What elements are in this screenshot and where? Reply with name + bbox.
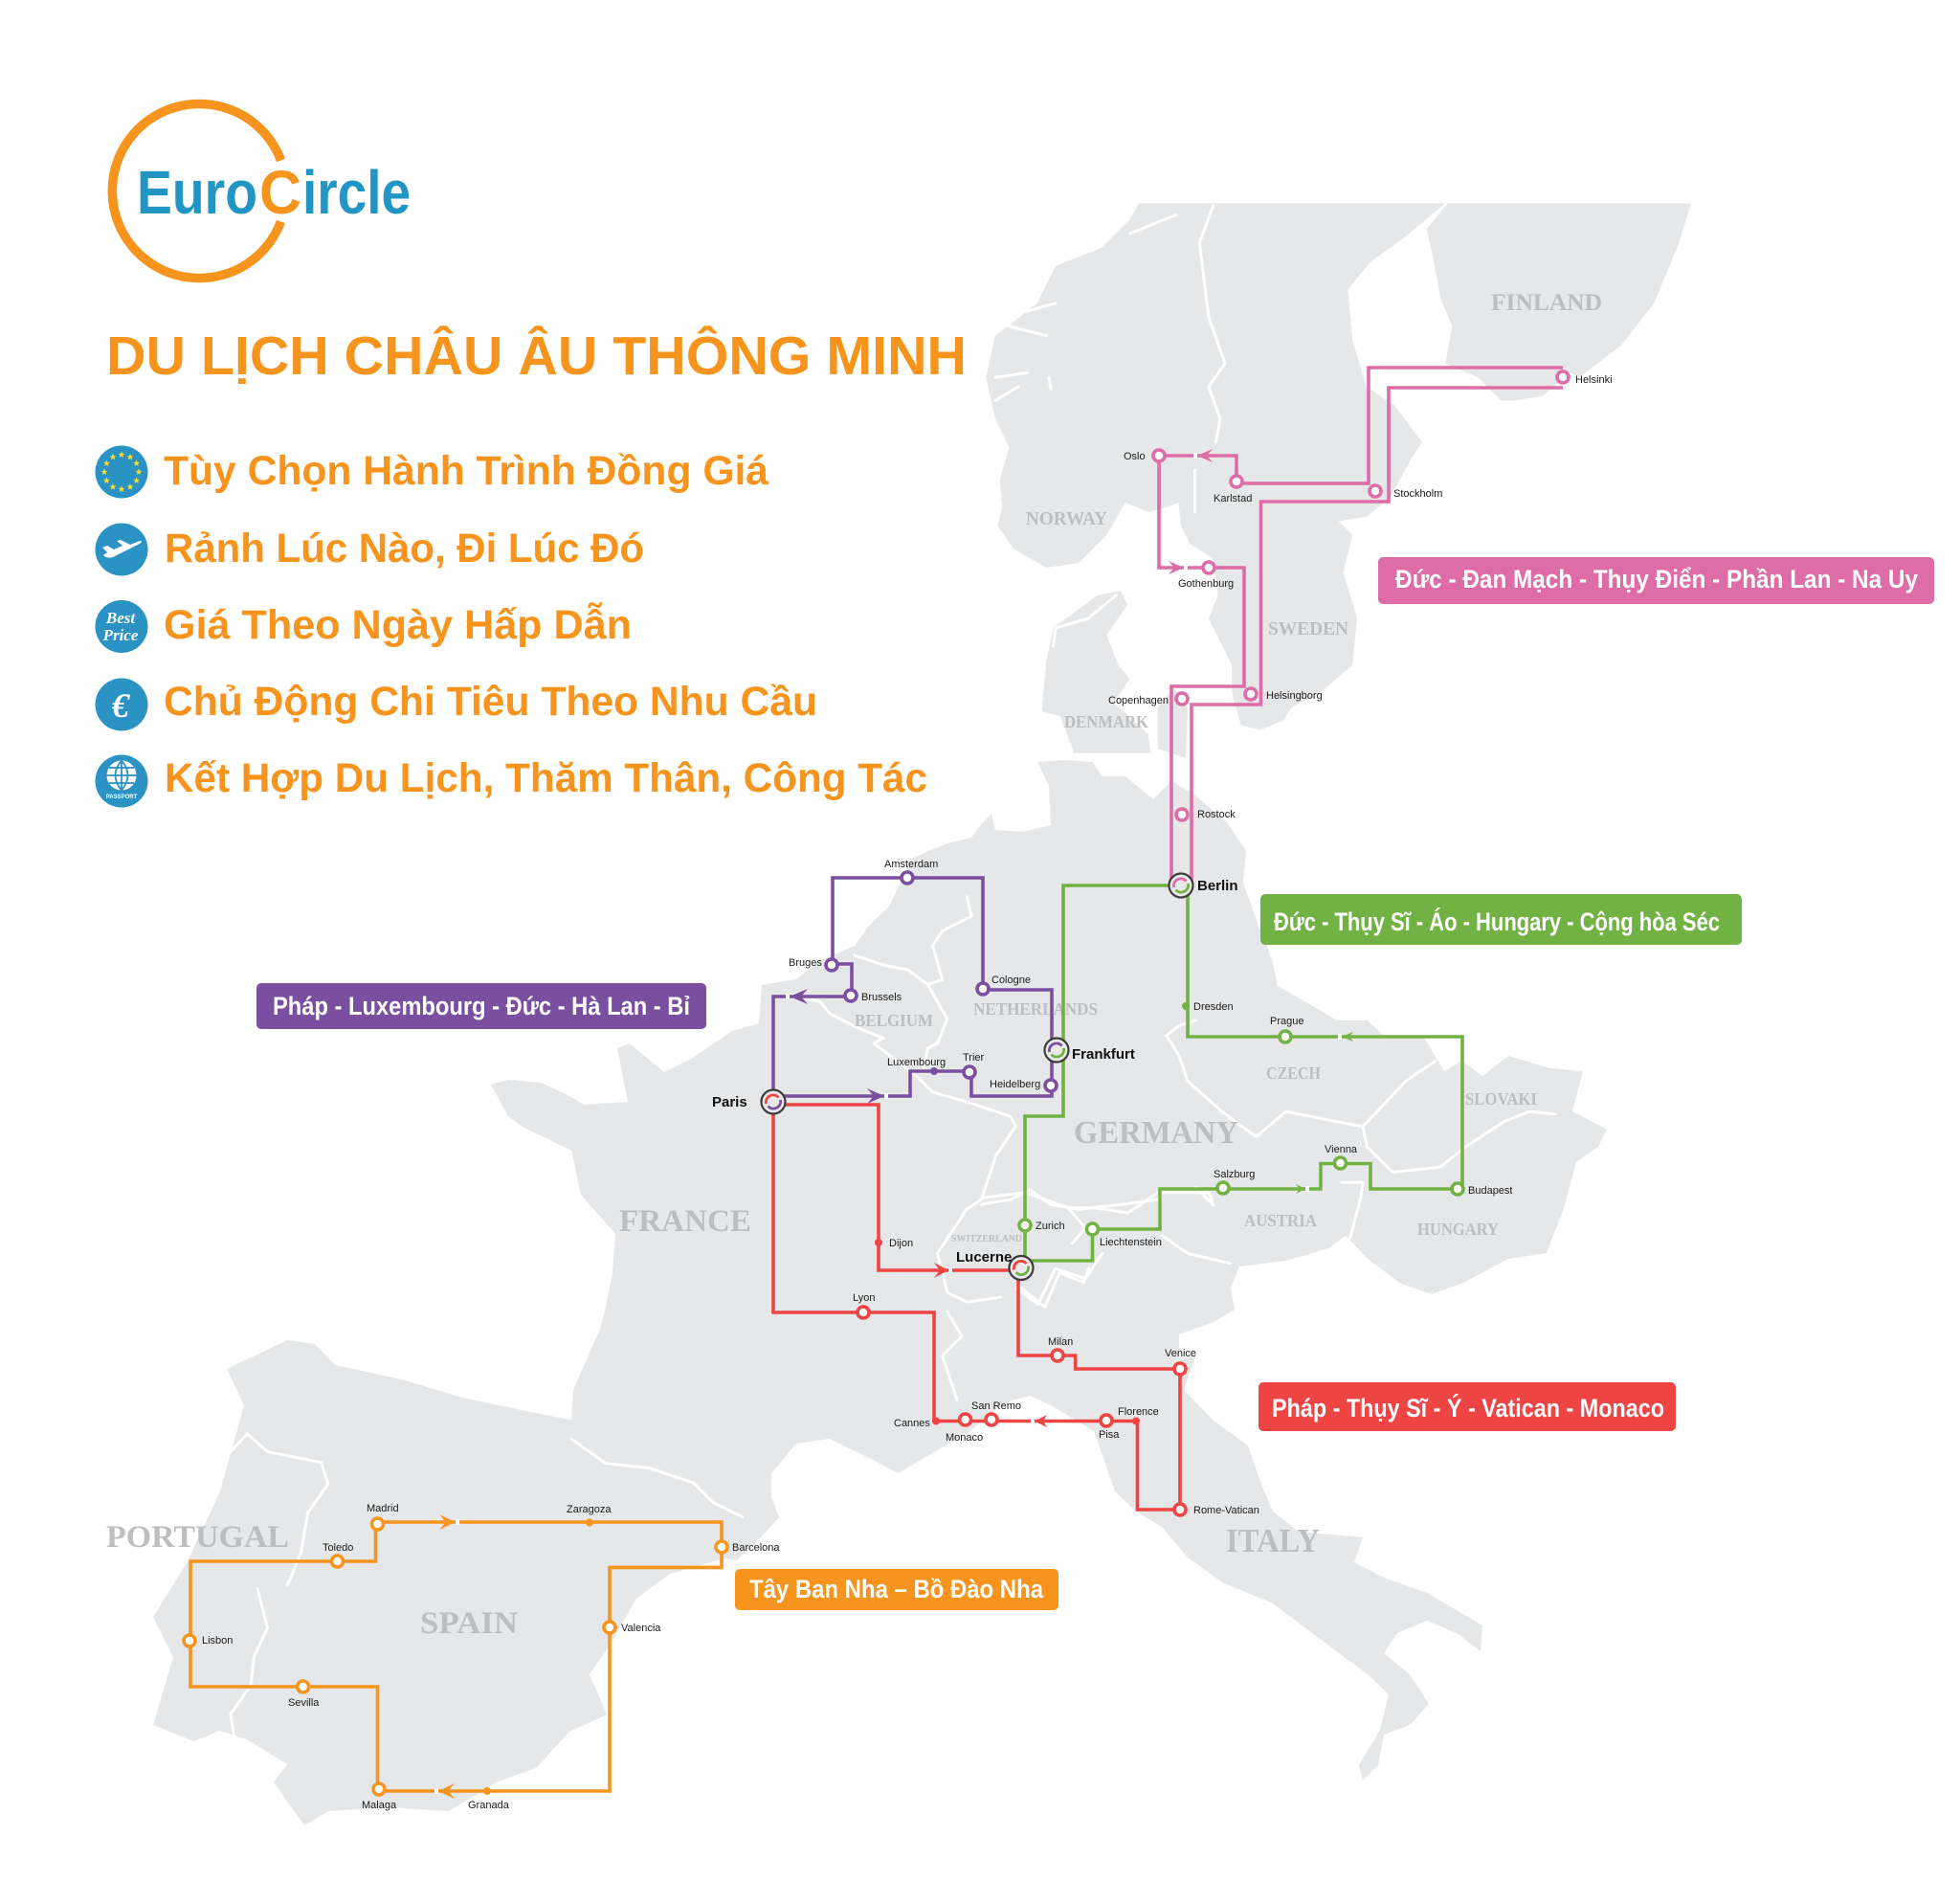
arrow <box>1296 1184 1309 1194</box>
stop: Sevilla: Sevilla <box>288 1697 320 1709</box>
country labels: SLOVAKI <box>1465 1089 1537 1109</box>
logo: EuroCircle: Euro <box>137 158 257 227</box>
stop: Monaco: Monaco <box>946 1432 983 1444</box>
stop: Dijon <box>875 1238 913 1249</box>
stop: Malaga <box>362 1783 397 1811</box>
stop: Helsinki <box>1557 371 1613 386</box>
stop: Budapest: Budapest <box>1468 1185 1512 1197</box>
stop: Rome-Vatican: Rome-Vatican <box>1193 1505 1259 1516</box>
feature: plane icon <box>96 523 147 576</box>
stop: Vienna: Vienna <box>1325 1144 1358 1155</box>
stop: Granada <box>468 1787 510 1811</box>
stop: Madrid <box>367 1503 399 1530</box>
stop: Pisa: Pisa <box>1099 1429 1120 1441</box>
stop: Lisbon <box>184 1635 233 1646</box>
stop: Venice: Venice <box>1165 1348 1196 1359</box>
stop: Prague: Prague <box>1270 1016 1303 1027</box>
stop: Malaga: Malaga <box>362 1800 397 1811</box>
stop: Copenhagen <box>1108 693 1188 706</box>
stop: Lyon <box>853 1292 875 1318</box>
map: continental Europe <box>153 760 1607 1826</box>
feature text: Chủ Động Chi Tiêu Theo Nhu Cầu <box>164 680 817 725</box>
feature: euro icon: € <box>111 686 130 725</box>
logo: EuroCircle: C <box>259 158 301 227</box>
stop: Brussels: Brussels <box>861 992 902 1003</box>
stop: Oslo <box>1124 450 1165 462</box>
feature: best price icon: Price <box>102 626 139 644</box>
country labels: FINLAND <box>1491 290 1602 316</box>
stop: Sevilla <box>288 1681 320 1709</box>
stop: Karlstad <box>1214 476 1252 504</box>
stop: Amsterdam <box>884 859 938 884</box>
stop: Liechtenstein: Liechtenstein <box>1100 1237 1162 1248</box>
label: pink route <box>1378 557 1934 604</box>
stop: Karlstad: Karlstad <box>1214 493 1252 504</box>
stop: Zaragoza: Zaragoza <box>567 1504 612 1515</box>
hub: Paris: Paris <box>712 1094 747 1110</box>
label: green route: Đức - Thụy Sĩ - Áo - Hungary - Cộng hòa Séc <box>1274 907 1720 936</box>
arrow <box>1169 561 1188 574</box>
feature text: Rảnh Lúc Nào, Đi Lúc Đó <box>165 526 644 571</box>
stop: Helsingborg: Helsingborg <box>1266 690 1323 702</box>
country labels: BELGIUM <box>855 1011 933 1030</box>
stop: Prague <box>1270 1016 1303 1042</box>
stop: Stockholm <box>1370 485 1442 500</box>
country labels <box>106 290 1602 1641</box>
stop: Milan <box>1048 1336 1073 1361</box>
stop: Zurich <box>1019 1220 1065 1232</box>
arrow <box>1031 1415 1047 1427</box>
stop: Dijon: Dijon <box>889 1238 913 1249</box>
stop: Luxembourg: Luxembourg <box>887 1057 946 1068</box>
feature: best price icon: Best <box>105 609 136 627</box>
label: orange route <box>735 1569 1058 1610</box>
label: red route: Pháp - Thụy Sĩ - Ý - Vatican - Monaco <box>1272 1393 1664 1422</box>
stop: Rostock: Rostock <box>1197 809 1236 820</box>
stop: Monaco <box>946 1414 983 1444</box>
stop: Rostock <box>1176 809 1236 820</box>
stop: Florence: Florence <box>1118 1406 1159 1418</box>
feature text: Giá Theo Ngày Hấp Dẫn <box>164 601 632 648</box>
feature: passport globe icon: PASSPORT <box>106 795 138 800</box>
stop: Cannes: Cannes <box>894 1418 930 1429</box>
stop: Bruges: Bruges <box>789 957 822 969</box>
feature: best price icon <box>96 600 147 653</box>
stop: Florence <box>1118 1406 1159 1424</box>
stop: Venice <box>1165 1348 1196 1375</box>
map: Scandinavia and Denmark <box>986 203 1691 758</box>
stop: Budapest <box>1452 1183 1512 1197</box>
country labels: SWITZERLAND <box>951 1234 1022 1244</box>
stop: Barcelona: Barcelona <box>732 1542 780 1554</box>
stop: Madrid: Madrid <box>367 1503 399 1514</box>
map: borders east <box>983 1020 1555 1304</box>
stop: Stockholm: Stockholm <box>1393 488 1442 500</box>
stop: Trier: Trier <box>963 1052 985 1064</box>
country labels: PORTUGAL <box>106 1520 289 1555</box>
title: DU LỊCH CHÂU ÂU THÔNG MINH <box>106 325 967 387</box>
country labels: DENMARK <box>1064 712 1148 731</box>
feature text: Tùy Chọn Hành Trình Đồng Giá <box>164 449 768 494</box>
country labels: ITALY <box>1226 1522 1320 1559</box>
stop: Toledo: Toledo <box>323 1542 353 1554</box>
label: purple route <box>256 983 706 1029</box>
label: orange route: Tây Ban Nha – Bồ Đào Nha <box>749 1575 1044 1603</box>
hub: Berlin: Berlin <box>1197 878 1238 894</box>
stop: Trier <box>963 1052 985 1078</box>
stop: San Remo <box>971 1400 1021 1425</box>
arrow <box>934 1263 952 1278</box>
arrow <box>439 1514 459 1530</box>
hub: Frankfurt <box>1045 1038 1135 1063</box>
arrow <box>1338 1032 1353 1042</box>
arrow <box>867 1088 888 1104</box>
hub: Frankfurt: Frankfurt <box>1072 1046 1135 1063</box>
stop: Barcelona <box>716 1541 780 1554</box>
stop: Amsterdam: Amsterdam <box>884 859 938 870</box>
feature: EU flag icon <box>96 446 147 498</box>
stop: Zurich: Zurich <box>1036 1221 1065 1232</box>
stop: Cologne: Cologne <box>991 974 1031 986</box>
arrow <box>786 989 808 1004</box>
stop: Valencia <box>604 1622 661 1634</box>
country labels: SPAIN <box>420 1606 518 1641</box>
map: borders Iberia <box>224 1434 328 1736</box>
stop: Oslo: Oslo <box>1124 451 1146 462</box>
stop: Cologne <box>977 974 1031 995</box>
hub: Lucerne: Lucerne <box>956 1249 1012 1266</box>
logo: EuroCircle <box>112 103 411 278</box>
stop: Pisa <box>1099 1415 1120 1441</box>
stop: Luxembourg <box>887 1057 946 1075</box>
country labels: NORWAY <box>1026 508 1108 529</box>
stop: Granada: Granada <box>468 1800 510 1811</box>
stop: Bruges <box>789 957 837 971</box>
stop: Toledo <box>323 1542 353 1567</box>
stop: Vienna <box>1325 1144 1358 1169</box>
stop: Salzburg <box>1214 1169 1255 1194</box>
stop: Lyon: Lyon <box>853 1292 875 1304</box>
map: borders central <box>571 897 1157 1517</box>
route: France Luxembourg Germany Netherlands Belgium (purple) <box>773 859 1057 1104</box>
stop: Dresden: Dresden <box>1193 1001 1234 1013</box>
stop: Liechtenstein <box>1087 1223 1162 1248</box>
label: purple route: Pháp - Luxembourg - Đức - Hà Lan - Bỉ <box>273 992 690 1020</box>
route: Germany Switzerland Austria Hungary Czech (green) <box>1019 885 1512 1261</box>
feature: euro icon <box>96 678 147 731</box>
stop: Gothenburg: Gothenburg <box>1178 578 1234 590</box>
feature: passport globe icon <box>96 754 147 808</box>
route: Spain Portugal (orange) <box>184 1503 780 1811</box>
route: France Switzerland Italy Vatican Monaco (red) <box>773 1105 1259 1516</box>
country labels: FRANCE <box>619 1204 751 1239</box>
label: green route <box>1260 894 1742 945</box>
country labels: NETHERLANDS <box>973 999 1098 1019</box>
arrow <box>434 1783 455 1799</box>
hub: Lucerne <box>956 1249 1034 1280</box>
arrow <box>1193 449 1213 462</box>
map: Europe landmass <box>153 203 1691 1826</box>
logo: EuroCircle: ircle <box>302 158 411 227</box>
country labels: AUSTRIA <box>1244 1211 1317 1230</box>
stop: Salzburg: Salzburg <box>1214 1169 1255 1180</box>
route: Germany Denmark Sweden Finland Norway (pink) <box>1108 368 1613 885</box>
label: pink route: Đức - Đan Mạch - Thụy Điển - Phần Lan - Na Uy <box>1395 565 1918 594</box>
feature text: Kết Hợp Du Lịch, Thăm Thân, Công Tác <box>165 756 927 801</box>
hub: Berlin <box>1169 873 1238 898</box>
country labels: SWEDEN <box>1268 618 1349 639</box>
stop: San Remo: San Remo <box>971 1400 1021 1412</box>
country labels: HUNGARY <box>1417 1220 1499 1239</box>
hub: Paris <box>712 1089 785 1114</box>
stop: Lisbon: Lisbon <box>202 1635 233 1646</box>
country labels: GERMANY <box>1074 1115 1238 1151</box>
stop: Zaragoza <box>567 1504 612 1526</box>
stop: Gothenburg <box>1178 562 1234 590</box>
stop: Helsingborg <box>1245 688 1323 702</box>
stop: Helsinki: Helsinki <box>1575 374 1613 386</box>
stop: Copenhagen: Copenhagen <box>1108 695 1169 706</box>
stop: Milan: Milan <box>1048 1336 1073 1348</box>
label: red route <box>1258 1382 1676 1431</box>
country labels: CZECH <box>1266 1064 1321 1083</box>
stop: Valencia: Valencia <box>621 1623 661 1634</box>
stop: Heidelberg: Heidelberg <box>990 1079 1040 1090</box>
stop: Brussels <box>845 990 902 1003</box>
